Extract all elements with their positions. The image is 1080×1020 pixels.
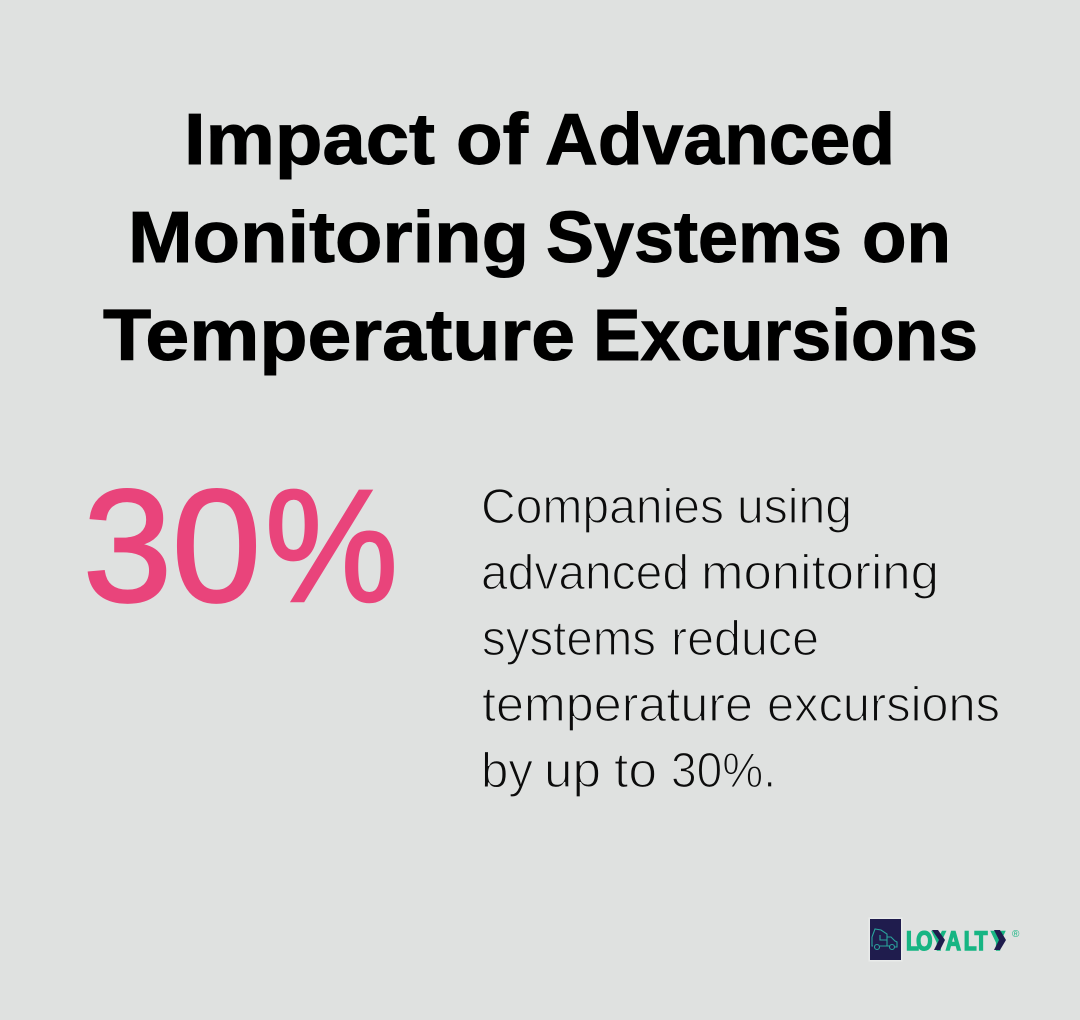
- title: on: [862, 198, 951, 278]
- big statistic: 30%: %: [265, 456, 398, 635]
- icon: truck badge: [868, 918, 902, 962]
- title: Excursions: [593, 296, 978, 376]
- logo wordmark: LOYALTY: [906, 927, 1005, 957]
- registered mark: ®: [1012, 929, 1020, 940]
- big statistic: 30%: [83, 456, 398, 635]
- title: Monitoring: [128, 198, 529, 278]
- description text: temperature: [482, 678, 753, 732]
- description text: monitoring: [701, 546, 939, 600]
- description text: advanced: [481, 546, 689, 600]
- title: Advanced: [545, 100, 895, 180]
- title: Impact: [184, 100, 435, 180]
- title: [103, 100, 978, 376]
- description text: excursions: [767, 678, 1000, 732]
- title: of: [456, 100, 529, 180]
- description text: to: [614, 744, 657, 798]
- description text: using: [737, 480, 852, 534]
- big statistic: 30%: 3: [83, 456, 172, 635]
- description text: systems: [482, 612, 656, 666]
- title: Temperature: [103, 296, 575, 376]
- title: Systems: [546, 198, 842, 278]
- description text: 30%.: [671, 744, 776, 798]
- big statistic: 30%: 0: [172, 456, 261, 635]
- description text: up: [544, 744, 601, 798]
- description text: Companies: [481, 480, 724, 534]
- description text: by: [481, 744, 533, 798]
- description text: [481, 480, 1000, 798]
- description text: reduce: [671, 612, 819, 666]
- logo: Loyalty: [868, 918, 1020, 962]
